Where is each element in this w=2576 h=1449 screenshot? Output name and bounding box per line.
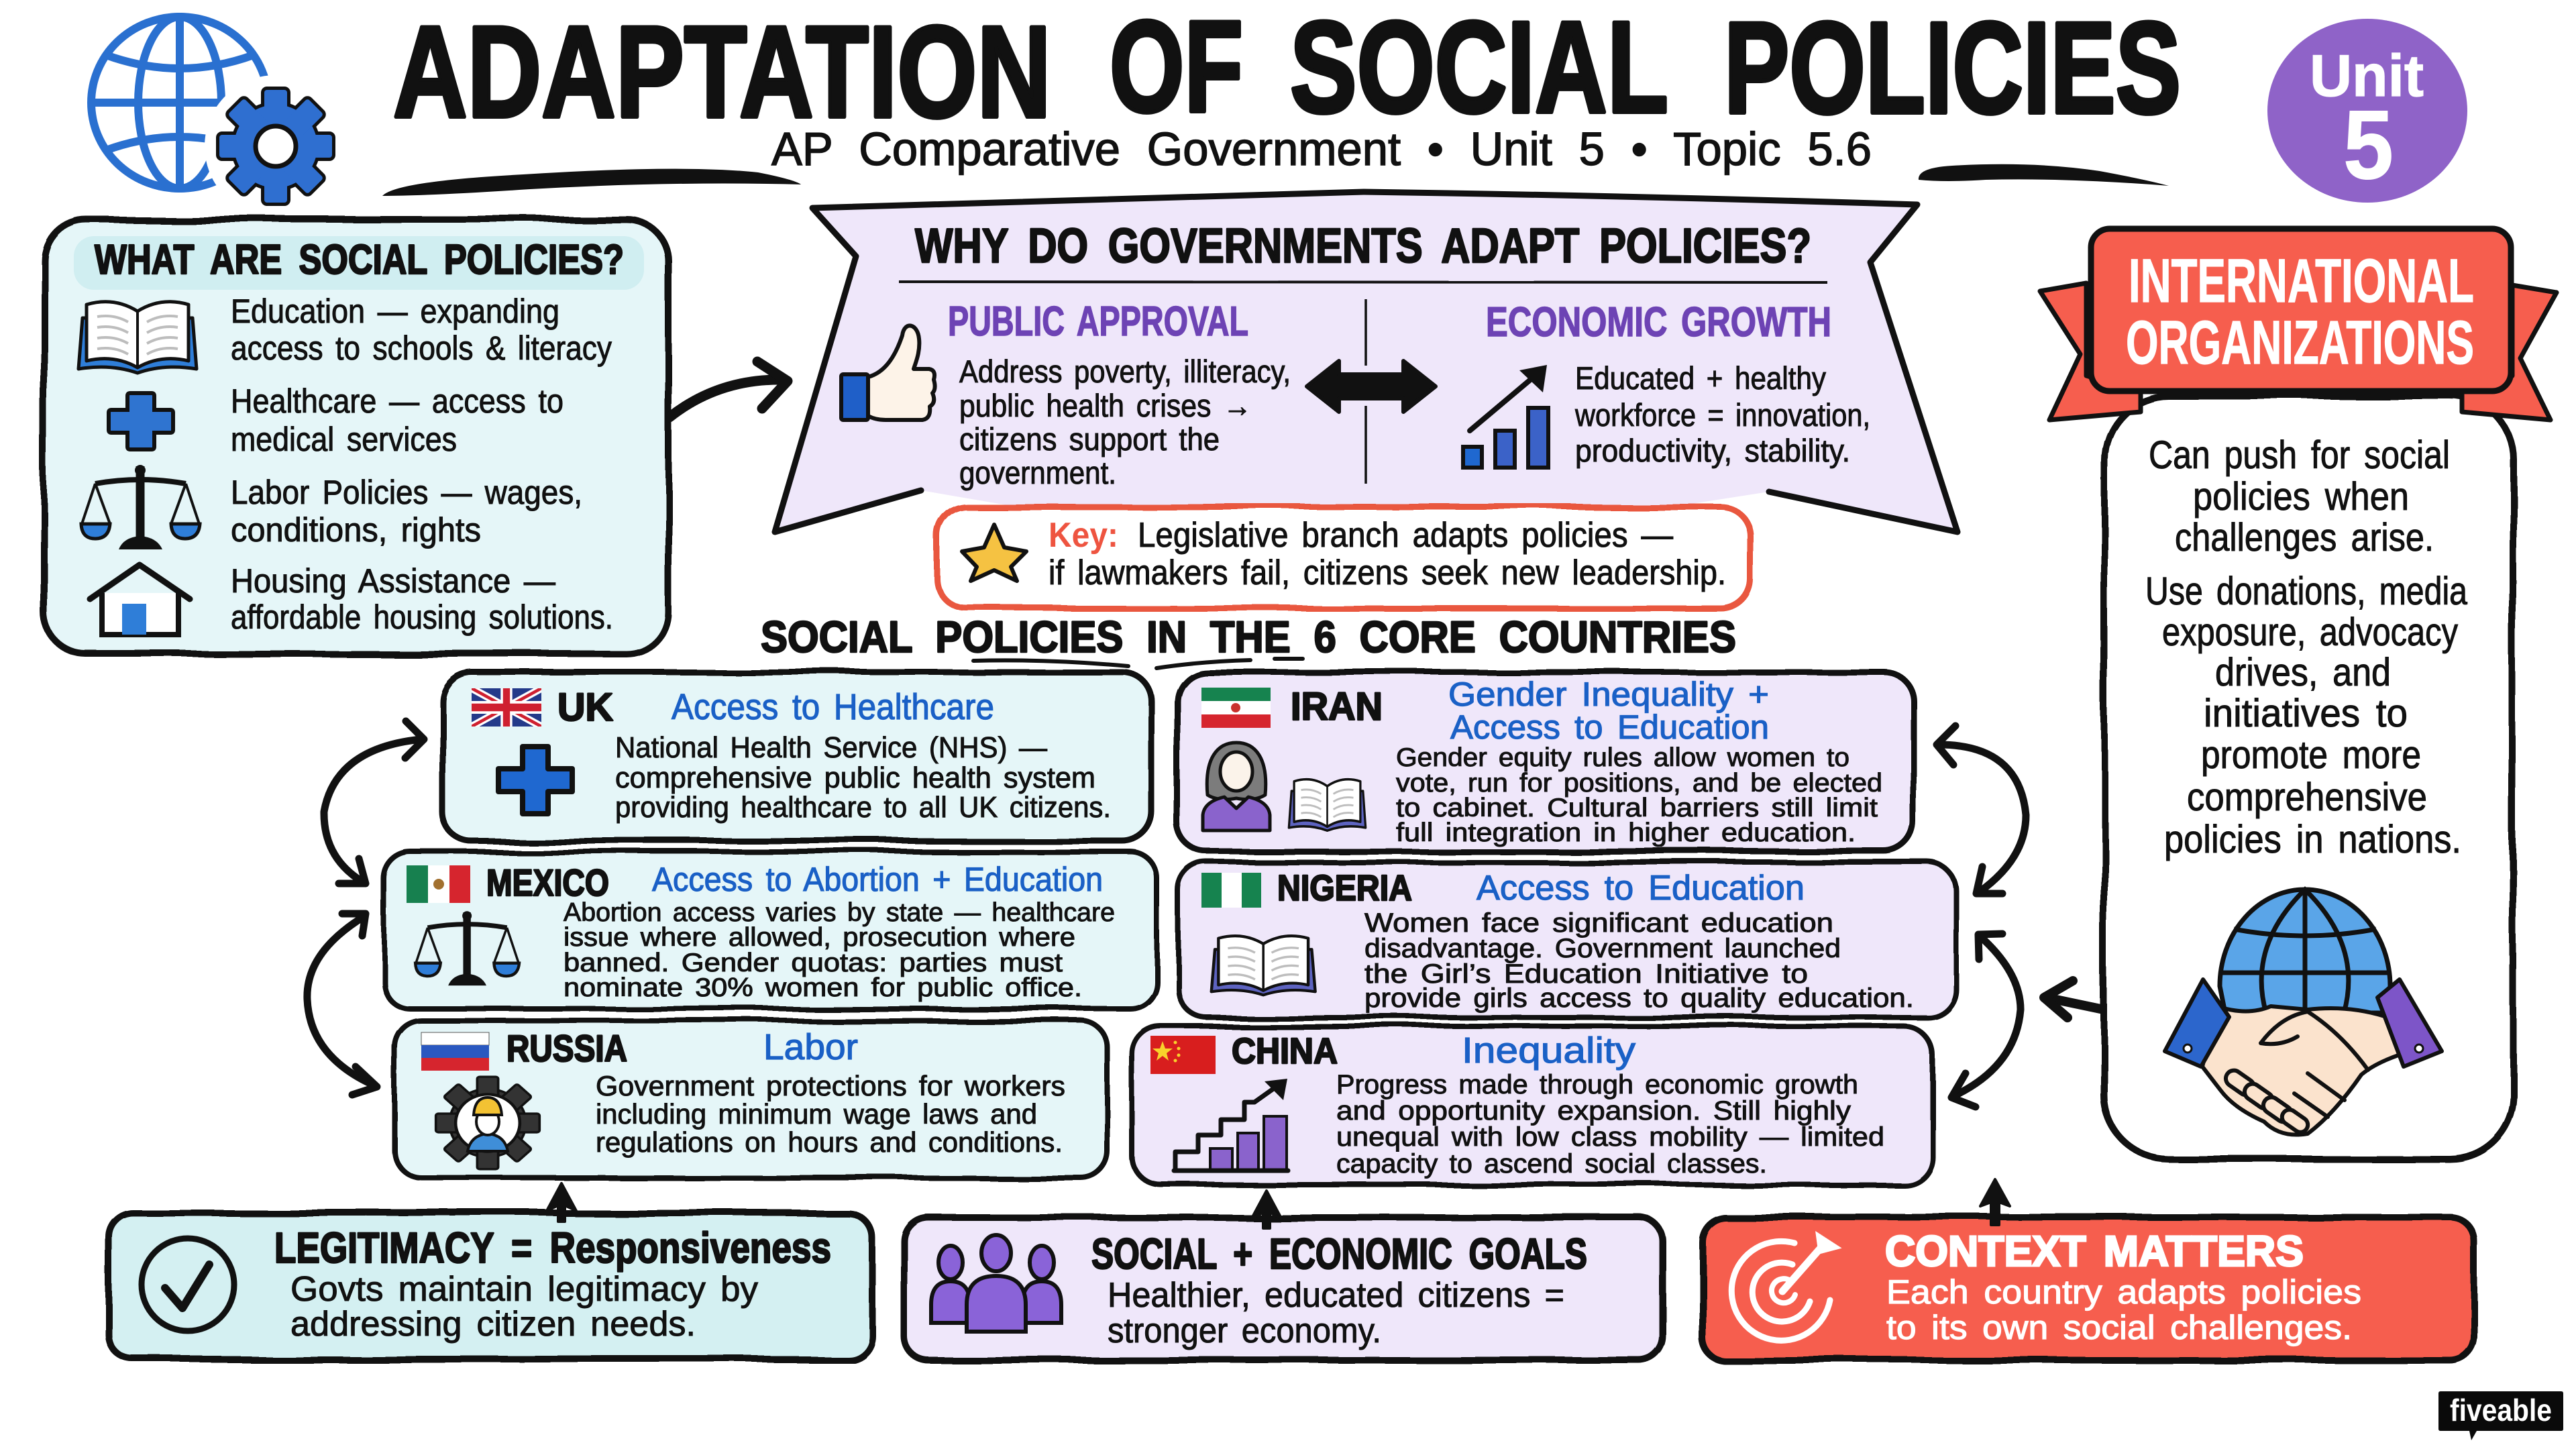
- card text: the Girl’s Education Initiative to: [1364, 959, 1808, 989]
- ribbon: [2091, 229, 2511, 391]
- education text: access to schools & literacy: [231, 329, 612, 367]
- icon: globe: [91, 17, 268, 189]
- card text: capacity to ascend social classes.: [1336, 1149, 1767, 1179]
- card: Nigeria: [1179, 863, 1956, 1018]
- card text: [290, 1270, 758, 1344]
- card text: [615, 731, 1111, 824]
- country name: NIGERIA: [1277, 868, 1412, 908]
- card background: [1132, 1026, 1932, 1185]
- callout box: [937, 506, 1750, 608]
- centre divider: [1364, 299, 1367, 484]
- policy focus: Access to Education: [1450, 708, 1769, 746]
- card text: addressing citizen needs.: [290, 1305, 696, 1344]
- housing text: Housing Assistance —: [231, 562, 555, 600]
- arrow: context up: [1980, 1179, 2010, 1225]
- public approval text: public health crises →: [959, 388, 1252, 423]
- callout text: if lawmakers fail, citizens seek new leadership.: [1049, 553, 1726, 592]
- card text: [1886, 1273, 2361, 1346]
- country name: IRAN: [1291, 685, 1383, 729]
- icon: bar chart with arrow: [1463, 365, 1548, 468]
- arrow: uk to mexico: [324, 721, 424, 883]
- country name: MEXICO: [486, 861, 609, 904]
- panel background: [44, 219, 668, 654]
- education text: [231, 292, 612, 367]
- policy focus: Gender Inequality +: [1448, 676, 1769, 713]
- panel text: initiatives to: [2204, 692, 2408, 735]
- heading: WHY DO GOVERNMENTS ADAPT POLICIES?: [915, 219, 1811, 273]
- badge: unit 5: [2267, 19, 2467, 203]
- card text: including minimum wage laws and: [596, 1098, 1037, 1130]
- policy focus: Inequality: [1462, 1030, 1635, 1071]
- public approval text: Address poverty, illiteracy,: [959, 354, 1291, 389]
- flag: China: [1150, 1036, 1216, 1074]
- handshake: [2165, 979, 2442, 1135]
- icon: book: [78, 302, 197, 373]
- ribbon tails: [2040, 283, 2557, 420]
- panel text: drives, and: [2215, 651, 2391, 694]
- education text: Education — expanding: [231, 292, 559, 330]
- icon: people: [931, 1235, 1061, 1332]
- flag: Russia: [421, 1032, 489, 1071]
- title: ADAPTATION: [393, 0, 1051, 145]
- arrow: nigeria to china: [1951, 934, 2021, 1107]
- title underline strokes: [382, 164, 2169, 196]
- item: healthcare: [109, 382, 564, 458]
- card text: nominate 30% women for public office.: [564, 973, 1082, 1002]
- subheading: PUBLIC APPROVAL: [948, 299, 1248, 345]
- card text: [1396, 743, 1882, 847]
- card text: Govts maintain legitimacy by: [290, 1270, 758, 1309]
- item: housing assistance: [90, 562, 613, 636]
- card heading: SOCIAL + ECONOMIC GOALS: [1091, 1230, 1587, 1278]
- banner fill: [775, 192, 1957, 532]
- card background: [395, 1021, 1108, 1178]
- public approval text: government.: [959, 455, 1116, 490]
- panel header band: [74, 236, 644, 290]
- heading: WHAT ARE SOCIAL POLICIES?: [95, 237, 624, 283]
- policy focus: Access to Education: [1477, 869, 1805, 908]
- labor text: [231, 474, 582, 549]
- country name: UK: [557, 686, 613, 729]
- arrow: mexico to russia: [307, 914, 377, 1095]
- panel body: [2104, 396, 2514, 1159]
- icon: book: [1289, 780, 1366, 830]
- card text: and opportunity expansion. Still highly: [1336, 1096, 1851, 1126]
- card text: Abortion access varies by state — healthcare: [564, 898, 1115, 927]
- icon: thumbs up: [841, 325, 935, 420]
- card: Russia: [395, 1021, 1108, 1178]
- labor text: conditions, rights: [231, 511, 481, 549]
- card heading: LEGITIMACY = Responsiveness: [274, 1224, 831, 1272]
- card text: [1108, 1276, 1564, 1350]
- card text: Progress made through economic growth: [1336, 1070, 1858, 1099]
- panel text: challenges arise.: [2175, 516, 2434, 559]
- policy focus: Access to Abortion + Education: [652, 861, 1103, 898]
- card text: National Health Service (NHS) —: [615, 731, 1047, 764]
- healthcare text: [231, 382, 564, 458]
- fingers: [2222, 1067, 2311, 1135]
- flag: Iran: [1201, 688, 1271, 728]
- panel text: [2145, 433, 2468, 861]
- arrow: international organizations to countries: [2044, 981, 2104, 1018]
- icon: scales: [81, 465, 200, 549]
- labor text: Labor Policies — wages,: [231, 474, 582, 511]
- logo wordmark: fiveable: [2450, 1393, 2552, 1428]
- card text: Healthier, educated citizens =: [1108, 1276, 1564, 1315]
- housing text: [231, 562, 613, 636]
- banner outline: [775, 192, 1957, 532]
- card text: to its own social challenges.: [1886, 1309, 2352, 1346]
- housing text: affordable housing solutions.: [231, 598, 613, 636]
- card text: [1364, 908, 1914, 1013]
- icon: gear: [205, 75, 347, 217]
- healthcare text: medical services: [231, 421, 457, 458]
- arrow: goals up: [1252, 1191, 1281, 1228]
- card text: regulations on hours and conditions.: [596, 1126, 1063, 1158]
- card background: [1701, 1217, 2474, 1360]
- panel text: policies when: [2193, 475, 2409, 519]
- subtitle: AP Comparative Government • Unit 5 • Topic 5.6: [771, 123, 1872, 175]
- flag: Mexico: [407, 865, 470, 903]
- card background: [384, 852, 1157, 1009]
- card text: vote, run for positions, and be elected: [1396, 769, 1882, 798]
- public approval text: citizens support the: [959, 421, 1220, 457]
- logo speech bubble: [2438, 1391, 2563, 1440]
- item: labor policies: [81, 465, 582, 549]
- ribbon heading: [2126, 247, 2474, 377]
- callout text: Legislative branch adapts policies —: [1138, 516, 1673, 555]
- economic growth text: Educated + healthy: [1575, 360, 1826, 396]
- card: Iran: [1177, 672, 1914, 852]
- card background: [109, 1213, 871, 1359]
- panel: international organizations: [2040, 229, 2557, 1159]
- policy focus: Labor: [763, 1027, 858, 1067]
- card text: stronger economy.: [1108, 1311, 1381, 1350]
- economic growth text: workforce = innovation,: [1574, 397, 1870, 433]
- card text: Each country adapts policies: [1886, 1273, 2361, 1311]
- card: UK: [442, 672, 1152, 841]
- card text: to cabinet. Cultural barriers still limit: [1396, 794, 1878, 822]
- card text: full integration in higher education.: [1396, 818, 1856, 847]
- healthcare text: Healthcare — access to: [231, 382, 564, 420]
- panel text: promote more: [2201, 733, 2421, 777]
- badge number: 5: [2343, 90, 2394, 199]
- icon: checkmark circle: [142, 1238, 234, 1331]
- panel text: policies in nations.: [2164, 818, 2461, 861]
- icon: house: [90, 565, 190, 635]
- column: economic growth: [1463, 299, 1870, 468]
- card text: issue where allowed, prosecution where: [564, 923, 1075, 952]
- panel text: exposure, advocacy: [2162, 610, 2458, 654]
- public approval text: [959, 354, 1291, 490]
- card text: comprehensive public health system: [615, 761, 1095, 794]
- icon: book: [1212, 936, 1316, 995]
- card text: [1336, 1070, 1884, 1179]
- callout text: Key:: [1049, 516, 1118, 555]
- icon: woman: [1203, 743, 1270, 830]
- card background: [1177, 672, 1914, 852]
- panel: why do governments adapt policies: [775, 192, 1957, 532]
- icon: globe and gear: [91, 17, 347, 217]
- card: China: [1132, 1026, 1932, 1185]
- heading underline: [973, 659, 1303, 668]
- card text: Gender equity rules allow women to: [1396, 743, 1849, 772]
- card text: banned. Gender quotas: parties must: [564, 949, 1063, 977]
- column: public approval: [841, 299, 1291, 490]
- badge circle: [2267, 19, 2467, 203]
- panel text: Can push for social: [2149, 433, 2450, 477]
- card text: Government protections for workers: [596, 1070, 1065, 1102]
- arrow: policies to why: [669, 362, 788, 417]
- arrow: iran to nigeria: [1937, 726, 2026, 894]
- country name: CHINA: [1232, 1031, 1338, 1071]
- title: [393, 0, 2181, 145]
- icon: rising stairs chart: [1174, 1079, 1288, 1171]
- panel text: comprehensive: [2187, 775, 2427, 819]
- card: Mexico: [384, 852, 1157, 1009]
- card: social and economic goals: [904, 1218, 1663, 1360]
- card heading: CONTEXT MATTERS: [1885, 1227, 2304, 1275]
- globe: [2220, 890, 2390, 1013]
- panel text: Use donations, media: [2145, 570, 2468, 613]
- subheading: ECONOMIC GROWTH: [1486, 299, 1831, 345]
- card background: [904, 1218, 1663, 1360]
- badge label: Unit: [2310, 42, 2424, 109]
- card: legitimacy: [109, 1213, 871, 1359]
- card text: providing healthcare to all UK citizens.: [615, 791, 1111, 824]
- card text: unequal with low class mobility — limited: [1336, 1122, 1884, 1152]
- section heading: core countries: SOCIAL POLICIES IN THE 6 CORE COUNTRIES: [761, 612, 1736, 661]
- card text: [596, 1070, 1065, 1158]
- icon: medical cross: [109, 393, 173, 449]
- card text: disadvantage. Government launched: [1364, 934, 1841, 963]
- callout text: [1049, 516, 1726, 592]
- icon: star: [962, 525, 1026, 581]
- callout: key: [937, 506, 1750, 608]
- panel: what are social policies: [44, 219, 668, 654]
- policy focus: Access to Healthcare: [672, 687, 994, 727]
- arrow: legitimacy up: [547, 1183, 576, 1222]
- icon: target: [1731, 1233, 1839, 1340]
- card background: [1179, 863, 1956, 1018]
- icon: scales: [415, 911, 519, 985]
- card background: [442, 672, 1152, 841]
- economic growth text: productivity, stability.: [1575, 433, 1850, 468]
- card text: Women face significant education: [1364, 908, 1833, 938]
- card text: [564, 898, 1115, 1002]
- country name: RUSSIA: [506, 1027, 627, 1069]
- item: education: [78, 292, 612, 373]
- policy focus: [1448, 676, 1769, 746]
- economic growth text: [1574, 360, 1870, 468]
- icon: worker in gear: [436, 1077, 539, 1169]
- icon: globe and handshake: [2165, 890, 2442, 1135]
- icon: medical cross: [498, 747, 572, 814]
- card text: provide girls access to quality education.: [1364, 983, 1914, 1013]
- flag: UK: [472, 688, 541, 727]
- card: context matters: [1701, 1217, 2474, 1360]
- arrow: two-way: [1307, 361, 1436, 412]
- flag: Nigeria: [1201, 873, 1261, 908]
- logo: fiveable: [2438, 1391, 2563, 1440]
